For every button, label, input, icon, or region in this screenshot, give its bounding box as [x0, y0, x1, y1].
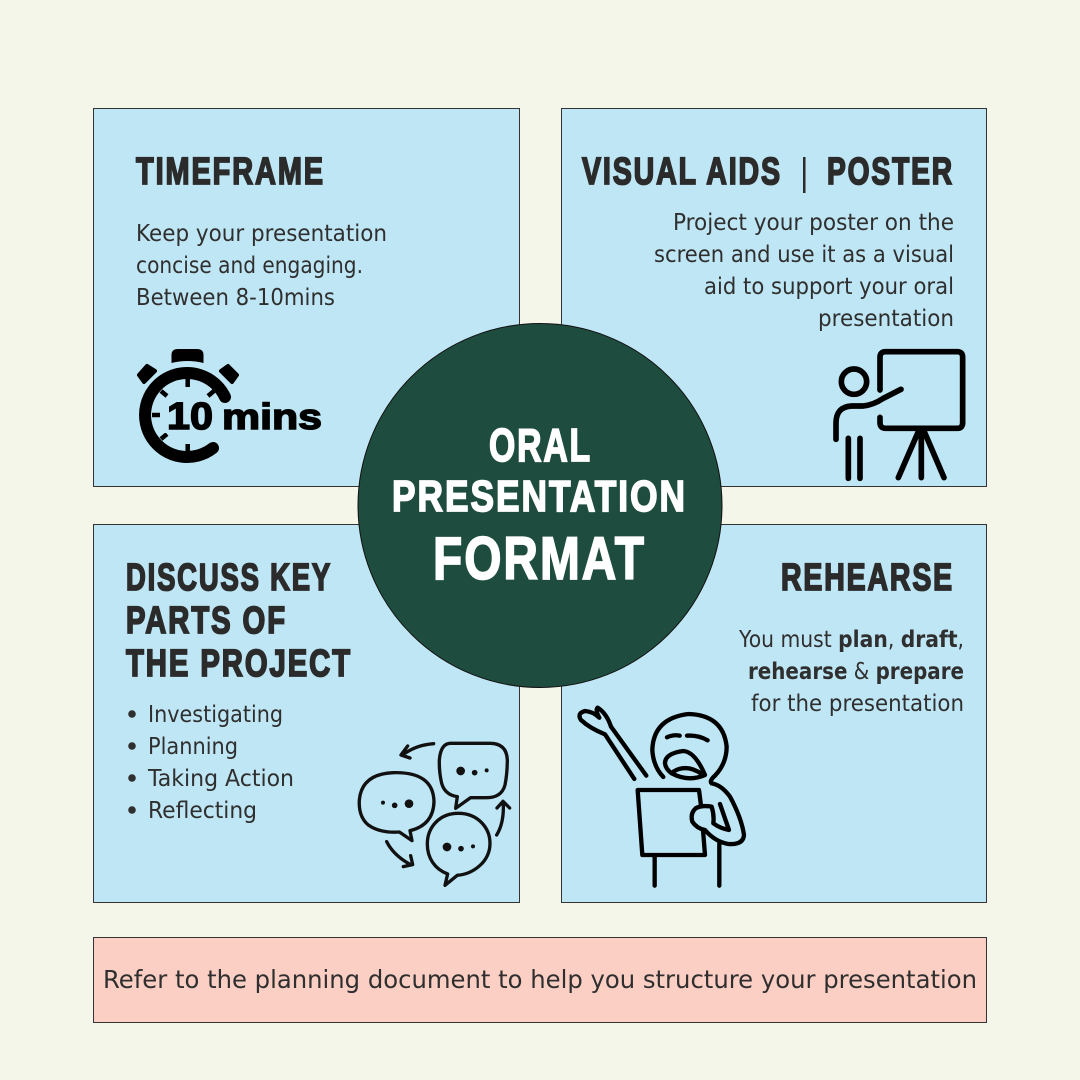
- title: [392, 419, 687, 592]
- icon: stopwatch 10 mins: [139, 349, 322, 457]
- text: timeframe description: Between 8-10mins: [136, 285, 335, 311]
- banner: planning document note: Refer to the planning document to help you structure your presentation: [103, 965, 977, 994]
- text: visual aids description: [654, 210, 954, 332]
- heading: visual aids poster: VISUAL AIDS: [582, 151, 782, 193]
- icon: person reading aloud: [580, 708, 744, 886]
- list: project stages: Taking Action: [147, 766, 294, 792]
- heading: discuss key parts of the project: DISCUSS KEY: [126, 557, 332, 599]
- title: PRESENTATION: [392, 472, 687, 521]
- icon: presenter at board: [836, 352, 963, 478]
- list: project stages: [128, 702, 294, 824]
- text: rehearse description: You must plan, draft,: [738, 627, 964, 653]
- heading: timeframe: TIMEFRAME: [136, 151, 325, 193]
- title: FORMAT: [433, 525, 646, 592]
- title: ORAL: [489, 419, 592, 471]
- heading: discuss key parts of the project: THE PROJECT: [126, 643, 352, 685]
- text: timeframe description: [136, 221, 387, 311]
- text: timeframe description: Keep your presentation: [136, 221, 387, 247]
- panel: rehearse: [562, 524, 986, 902]
- text: rehearse description: [738, 627, 964, 717]
- list: project stages: Planning: [148, 734, 238, 760]
- text: rehearse description: rehearse & prepare: [748, 659, 964, 685]
- icon: stopwatch 10 mins: mins: [222, 396, 322, 437]
- list: project stages: Investigating: [148, 702, 283, 728]
- icon: speech bubbles with arrows: [359, 743, 510, 885]
- heading: discuss key parts of the project: PARTS OF: [126, 600, 287, 642]
- text: visual aids description: screen and use it as a visual: [654, 242, 954, 268]
- heading: rehearse: REHEARSE: [781, 557, 954, 599]
- text: timeframe description: concise and engaging.: [136, 253, 363, 279]
- banner: planning document note: [94, 938, 986, 1022]
- text: visual aids description: Project your poster on the: [673, 210, 954, 236]
- center circle: oral presentation format: [358, 324, 722, 688]
- panel: timeframe: [94, 108, 520, 486]
- text: visual aids description: presentation: [818, 306, 954, 332]
- panel: discuss key parts: [94, 524, 520, 902]
- text: visual aids description: aid to support your oral: [704, 274, 954, 300]
- list: project stages: Reflecting: [148, 798, 257, 824]
- icon: stopwatch 10 mins: 10: [167, 396, 213, 438]
- panel: visual aids: [562, 108, 986, 486]
- heading: discuss key parts of the project: [126, 557, 352, 685]
- heading: visual aids poster: POSTER: [827, 151, 954, 193]
- text: rehearse description: for the presentation: [751, 691, 964, 717]
